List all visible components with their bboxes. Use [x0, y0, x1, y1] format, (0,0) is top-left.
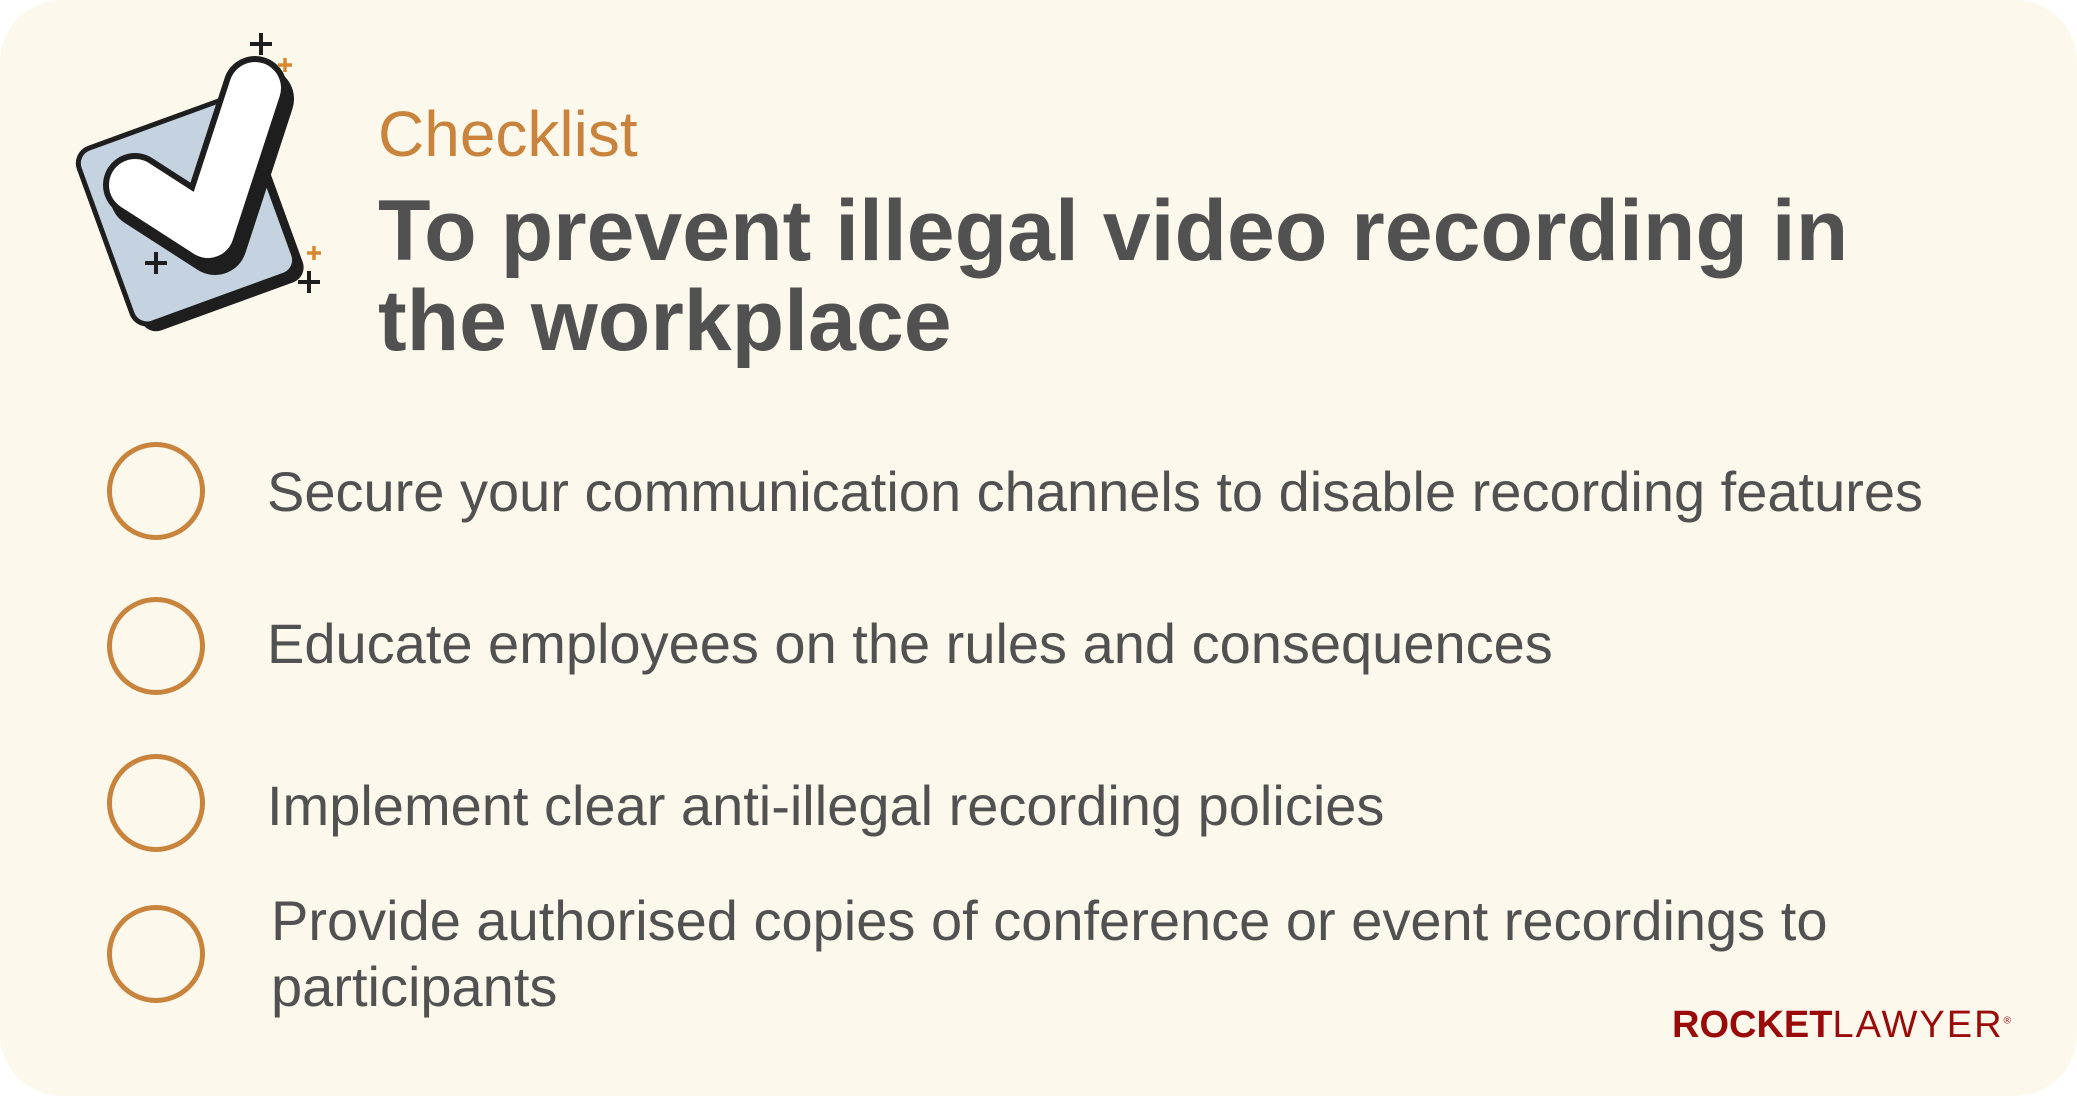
item 4 — [107, 889, 1827, 1018]
item 3 — [107, 754, 1384, 852]
title: the workplace — [378, 273, 952, 369]
card background: participants — [271, 955, 557, 1018]
card background: Provide authorised copies of conference or event recordings to — [271, 889, 1827, 952]
item 1 — [107, 442, 1923, 540]
title: To prevent illegal video recording in — [378, 183, 1848, 279]
card background: Implement clear anti-illegal recording policies — [267, 774, 1384, 837]
item 2 — [107, 597, 1553, 695]
title — [378, 183, 1848, 369]
card background: Educate employees on the rules and consequences — [267, 612, 1553, 675]
icon: checkbox with check mark — [76, 33, 321, 332]
subtitle: Checklist: Checklist — [378, 98, 638, 170]
card background: Secure your communication channels to disable recording features — [267, 460, 1923, 523]
logo: Rocket Lawyer: ROCKETLAWYER® — [1672, 1004, 2011, 1046]
